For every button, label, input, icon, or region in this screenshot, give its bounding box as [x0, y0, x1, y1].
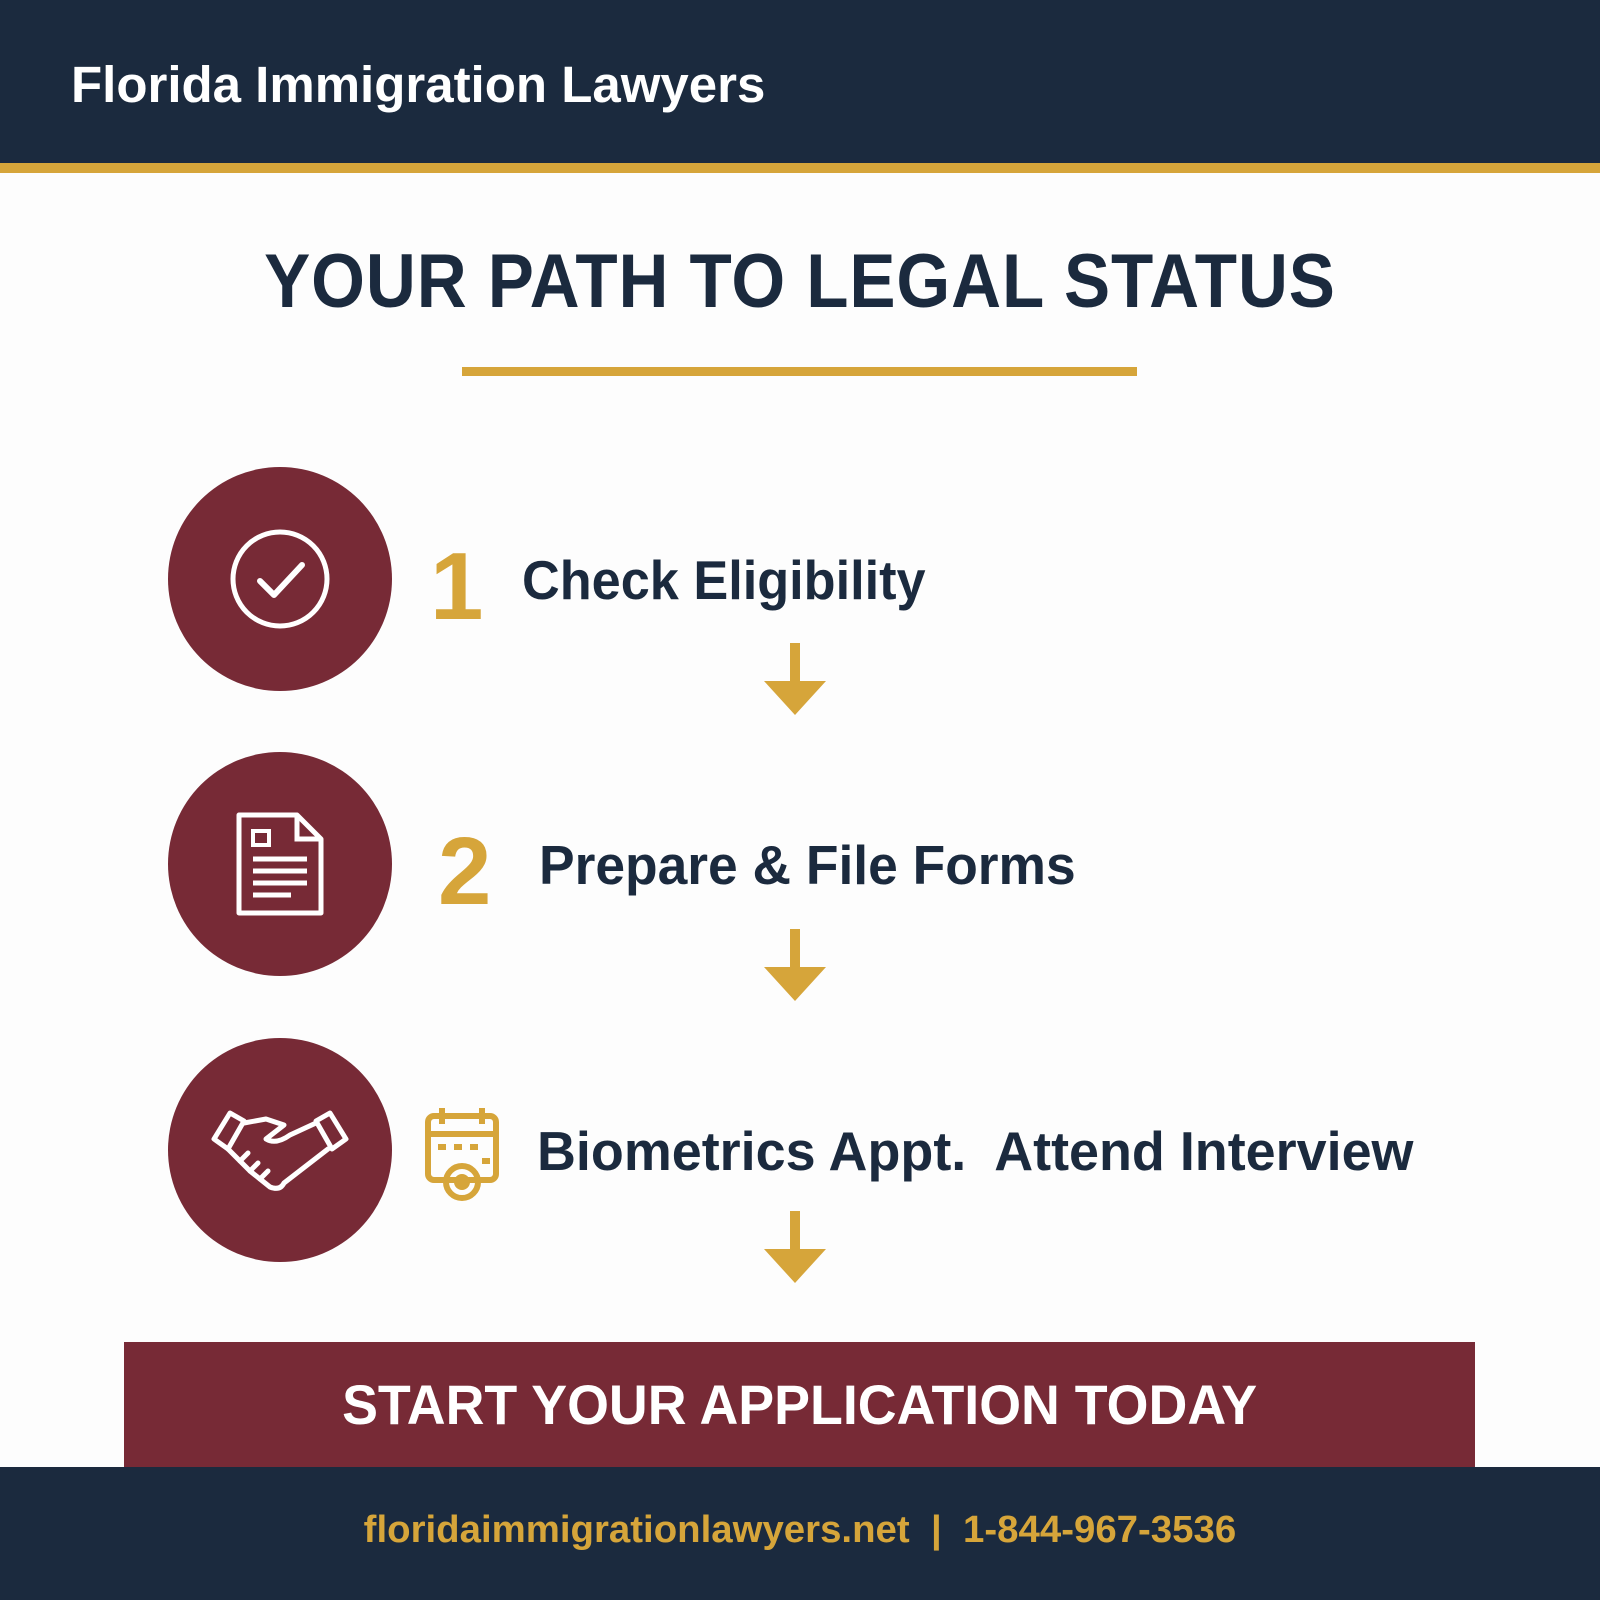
CTA banner	[124, 1342, 1475, 1468]
icon: handshake	[168, 1038, 392, 1262]
header title: Florida Immigration Lawyers	[71, 56, 765, 113]
header bar	[0, 0, 1600, 173]
step label: biometrics & interview: Biometrics Appt. Attend Interview	[537, 1120, 1413, 1182]
icon: calendar	[425, 1108, 499, 1201]
arrow 2	[764, 929, 826, 1001]
main title: YOUR PATH TO LEGAL STATUS	[264, 239, 1336, 324]
number 1: 1	[430, 533, 483, 640]
icon: check circle	[168, 467, 392, 691]
arrow 3	[764, 1211, 826, 1283]
arrow 1	[764, 643, 826, 715]
step label: prepare & file forms: Prepare & File Forms	[539, 834, 1076, 896]
step 1	[168, 467, 926, 691]
step label: check eligibility: Check Eligibility	[522, 549, 926, 611]
step 3	[168, 1038, 1414, 1262]
step 2	[168, 752, 1076, 976]
title underline	[462, 367, 1137, 376]
number 2: 2	[438, 818, 491, 925]
footer bar	[0, 1467, 1600, 1600]
CTA text: START YOUR APPLICATION TODAY	[342, 1373, 1257, 1436]
icon: document	[168, 752, 392, 976]
footer contact: floridaimmigrationlawyers.net | 1-844-967-3536	[364, 1508, 1236, 1550]
